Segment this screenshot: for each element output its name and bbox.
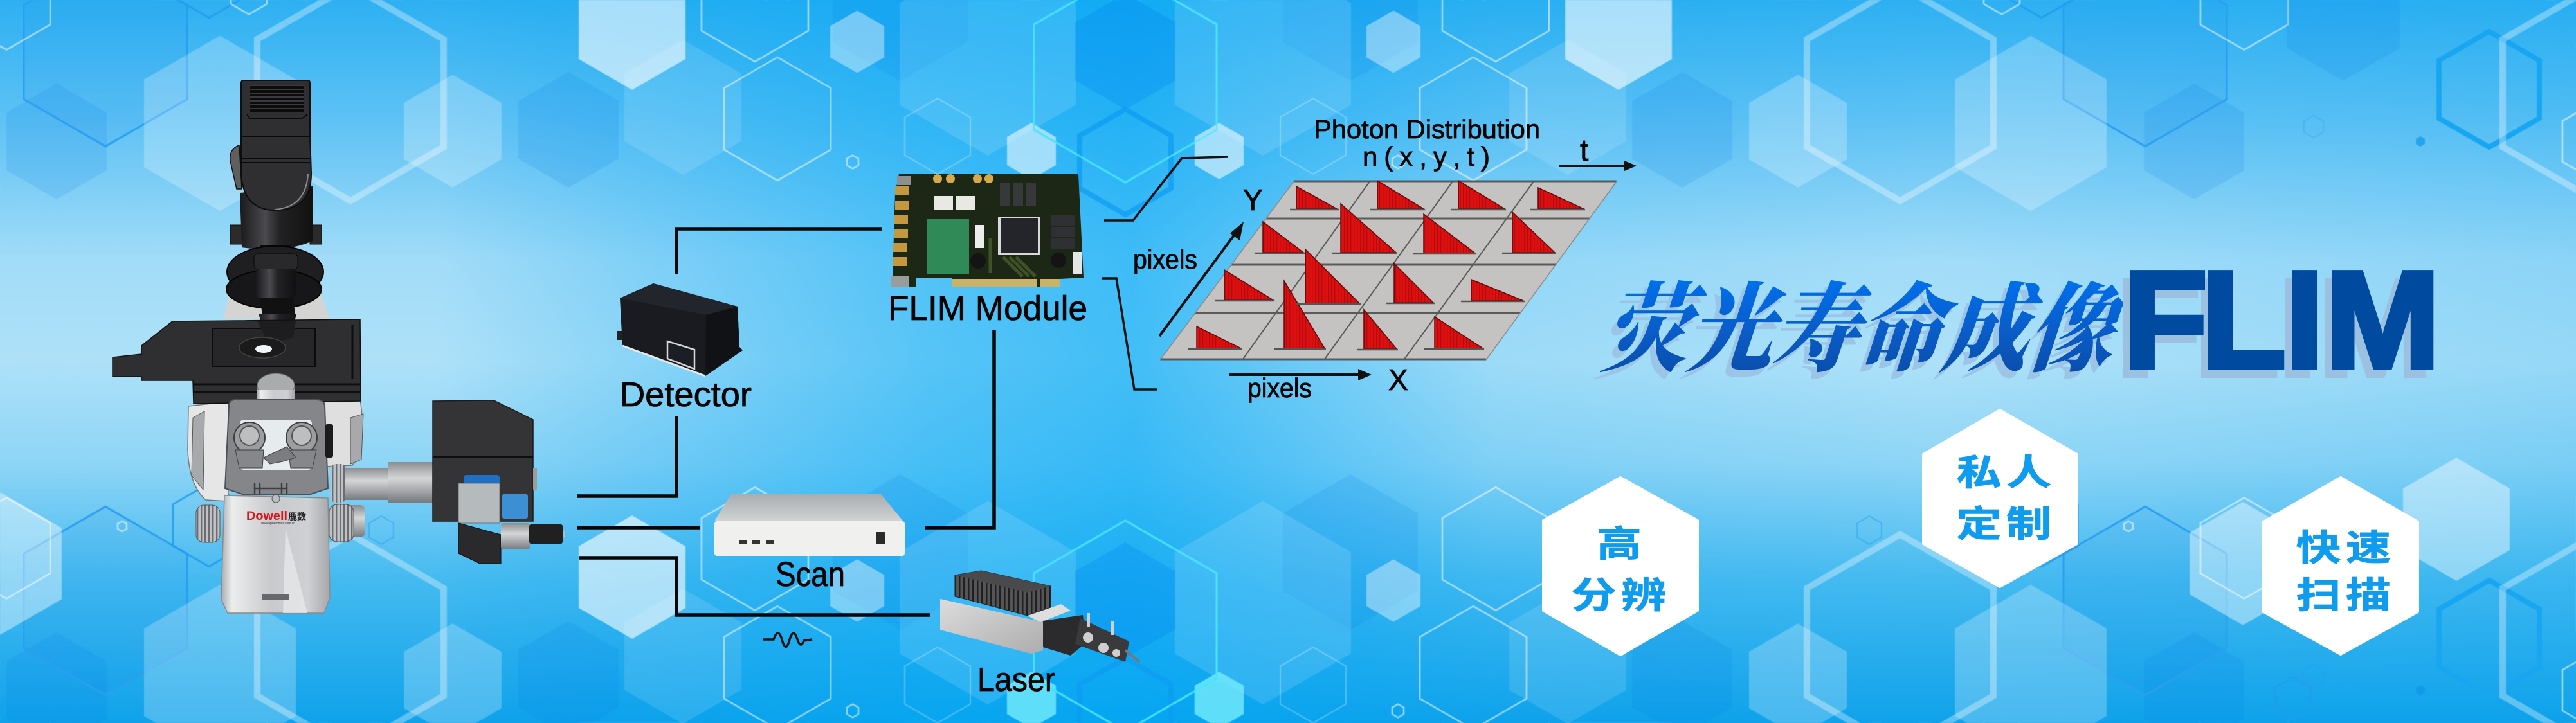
axis X xyxy=(1229,363,1408,397)
focus knob right xyxy=(310,225,322,244)
detector top highlight xyxy=(620,283,738,315)
callout: customization xyxy=(1923,410,2077,587)
microscope: side lettering left xyxy=(192,411,204,490)
line to scan xyxy=(577,526,700,530)
green daughter card xyxy=(927,219,969,274)
callout: fast scan: 扫描 xyxy=(2296,576,2395,616)
capacitor 2 xyxy=(1051,253,1066,268)
scanner box xyxy=(433,400,565,564)
axis X: X xyxy=(1388,363,1408,397)
white headers xyxy=(934,196,953,210)
scanner screw xyxy=(533,468,537,490)
microscope: logo: 鹿数 xyxy=(288,512,306,522)
callout: customization: 私人 xyxy=(1957,454,2056,493)
label: Detector: Detector xyxy=(620,375,752,414)
lens tip xyxy=(563,531,565,537)
microscope: connection tube xyxy=(331,462,433,503)
laser head xyxy=(1043,615,1086,656)
laser barrel xyxy=(1075,618,1129,662)
heat sink xyxy=(955,571,1051,616)
detector body xyxy=(620,283,743,376)
line to detector and FLIM module xyxy=(577,416,676,496)
icon: pulse waveform xyxy=(763,633,812,647)
detector xyxy=(617,283,743,376)
label: Scan: Scan xyxy=(776,555,845,594)
collar xyxy=(260,245,291,251)
barrel silver parts xyxy=(1083,613,1120,657)
microscope: ribbed knob left xyxy=(196,505,220,542)
corner connectors xyxy=(897,176,911,185)
callout: high resolution xyxy=(1543,478,1698,655)
objective lens xyxy=(257,321,296,341)
dome highlight xyxy=(275,174,308,210)
lower barrel xyxy=(240,186,313,249)
upper block xyxy=(241,80,311,210)
gold edge connector short xyxy=(1040,279,1060,287)
axis t: t xyxy=(1580,134,1588,168)
label: pixels x: pixels xyxy=(1247,373,1312,403)
chip core xyxy=(1001,218,1038,253)
microscope: side lettering right xyxy=(350,414,363,464)
microscope: logo: dowellphotonics.com.cn xyxy=(261,522,295,526)
detector side shade xyxy=(705,307,743,376)
microscope: body highlight xyxy=(283,528,307,613)
microscope xyxy=(113,80,565,613)
detector knob xyxy=(617,331,622,340)
eyepiece left xyxy=(234,422,265,468)
histogram baselines xyxy=(1188,210,1585,350)
axis t xyxy=(1559,134,1637,171)
gold connectors xyxy=(893,186,909,266)
connection lines xyxy=(577,229,994,615)
microscope: logo: Dowell xyxy=(246,510,287,523)
dark block xyxy=(458,523,501,564)
chart formula: n ( x , y , t ) xyxy=(1363,141,1490,172)
white header 2 xyxy=(956,196,975,210)
callout: high resolution: 分辨 xyxy=(1572,576,1671,616)
label: pixels y: pixels xyxy=(1133,244,1197,274)
fibre tip xyxy=(1125,650,1139,662)
line to laser xyxy=(579,558,930,615)
microscope: side housing left xyxy=(188,402,228,501)
aperture opening xyxy=(255,345,272,353)
head clips xyxy=(255,483,287,494)
lens barrel xyxy=(501,523,530,549)
microscope: black side latch xyxy=(325,424,333,458)
line scan to module xyxy=(925,330,994,528)
blue ring xyxy=(464,475,500,485)
microscope: eyepiece head xyxy=(225,400,328,503)
microscope: lamp cap xyxy=(253,373,299,413)
detector panel xyxy=(667,341,694,369)
side lever xyxy=(230,145,242,189)
white part 2 xyxy=(1073,252,1082,274)
callout: high resolution: 高 xyxy=(1597,525,1642,564)
focus knob left xyxy=(230,225,243,244)
scan top face xyxy=(714,494,905,523)
PCB traces xyxy=(990,238,1035,276)
chart grid lines xyxy=(1160,181,1617,360)
scan front face xyxy=(714,521,905,556)
stage window xyxy=(212,328,315,366)
eyepiece right xyxy=(286,422,317,468)
bracket line upper xyxy=(1104,157,1228,220)
microscope: camera head xyxy=(230,80,322,251)
laser base side xyxy=(940,599,1043,654)
scanner seam xyxy=(433,456,533,458)
microscope: rear pillar xyxy=(223,295,330,319)
label: Laser: Laser xyxy=(977,661,1055,699)
callout: fast scan xyxy=(2263,478,2418,654)
label: FLIM Module: FLIM Module xyxy=(888,289,1087,328)
black lens tube xyxy=(529,524,563,544)
chart title: Photon Distribution xyxy=(1314,114,1540,144)
gold edge connector xyxy=(952,279,1037,287)
bracket line lower xyxy=(1102,278,1157,389)
axis Y: Y xyxy=(1243,183,1263,217)
board xyxy=(891,174,1084,287)
SMA connectors xyxy=(933,174,993,183)
head screw xyxy=(272,495,280,503)
stage aperture xyxy=(239,337,286,358)
axis Y xyxy=(1159,183,1263,336)
laser collar xyxy=(1028,604,1071,622)
microscope: logo xyxy=(246,510,306,526)
heat sink top xyxy=(955,571,1051,593)
grey block xyxy=(458,483,500,523)
FLIM module circuit board xyxy=(891,174,1084,287)
microscope: side housing right xyxy=(325,400,362,467)
scan connectors xyxy=(739,540,774,544)
head window xyxy=(240,420,312,470)
ICs right xyxy=(1051,215,1075,249)
head seam lines xyxy=(242,114,310,163)
white parts xyxy=(975,225,984,248)
microscope: stage xyxy=(113,319,361,404)
title: FLIM: FLIM xyxy=(2123,242,2440,397)
callout: fast scan: 快速 xyxy=(2296,529,2395,568)
callout: customization: 定制 xyxy=(1957,505,2056,544)
ventilation grille xyxy=(250,85,304,112)
scan box xyxy=(714,494,905,556)
lower corner connector xyxy=(891,276,909,287)
microscope: condenser disc upper xyxy=(227,246,323,298)
chart plane xyxy=(1160,181,1617,360)
laser xyxy=(940,571,1139,662)
title: Chinese: 荧光寿命成像 xyxy=(1594,278,2138,384)
microscope: base label xyxy=(262,594,289,600)
photon histograms xyxy=(1197,181,1584,349)
microscope: condenser disc lower xyxy=(226,270,322,308)
capacitors xyxy=(970,253,986,269)
scan switch xyxy=(876,532,885,544)
microscope: ribbed knob right xyxy=(329,504,365,542)
small ICs top xyxy=(1000,183,1036,206)
stage rails xyxy=(193,325,360,392)
eyepiece bridge xyxy=(264,447,296,464)
main chip xyxy=(998,217,1040,255)
detector base strip xyxy=(622,346,705,376)
blue cylinder xyxy=(502,494,528,519)
microscope: lower body xyxy=(221,495,330,613)
photon distribution chart xyxy=(1160,181,1617,360)
line detector to module xyxy=(676,229,882,274)
microscope: condenser neck xyxy=(254,254,298,343)
